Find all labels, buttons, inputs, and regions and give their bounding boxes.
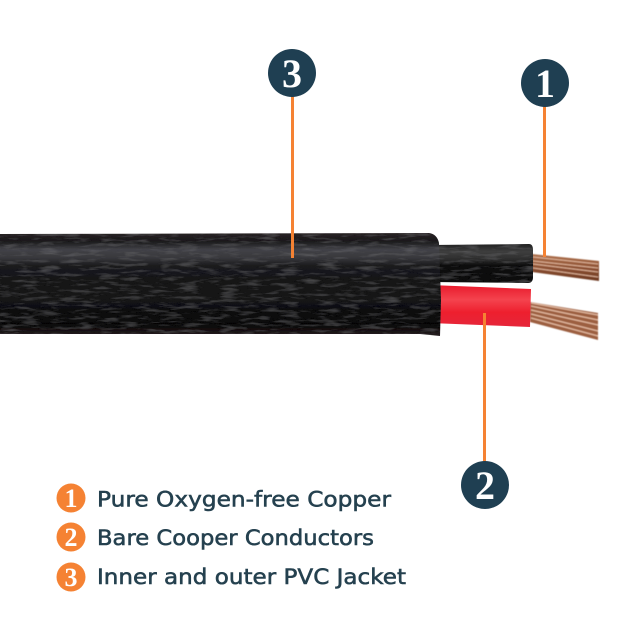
inner black insulated core (430, 244, 533, 283)
legend item 1: Pure Oxygen-free Copper (97, 488, 391, 512)
legend item 1 (56, 484, 391, 513)
callout 1 (521, 59, 569, 107)
callout 2 (461, 461, 509, 509)
legend item 2: Bare Cooper Conductors (97, 526, 374, 551)
leader line to callout 1 (543, 105, 546, 257)
legend item 2: 2 (64, 523, 78, 552)
callout 3: 3 (282, 51, 302, 96)
callout 2: 2 (475, 463, 495, 508)
legend item 1: 1 (64, 484, 78, 513)
leader line to callout 3 (291, 95, 294, 258)
legend (56, 484, 406, 592)
leader line to callout 2 (483, 313, 486, 463)
legend item 3: 3 (64, 563, 78, 592)
callout 3 (268, 49, 316, 97)
inner red insulated core (430, 285, 531, 327)
legend item 3 (56, 562, 406, 592)
copper strands: lower conductor (530, 302, 598, 340)
outer black PVC jacket (0, 233, 441, 336)
callout 1: 1 (535, 61, 555, 106)
legend item 3: Inner and outer PVC Jacket (97, 565, 406, 590)
copper strands: upper conductor (532, 254, 599, 281)
